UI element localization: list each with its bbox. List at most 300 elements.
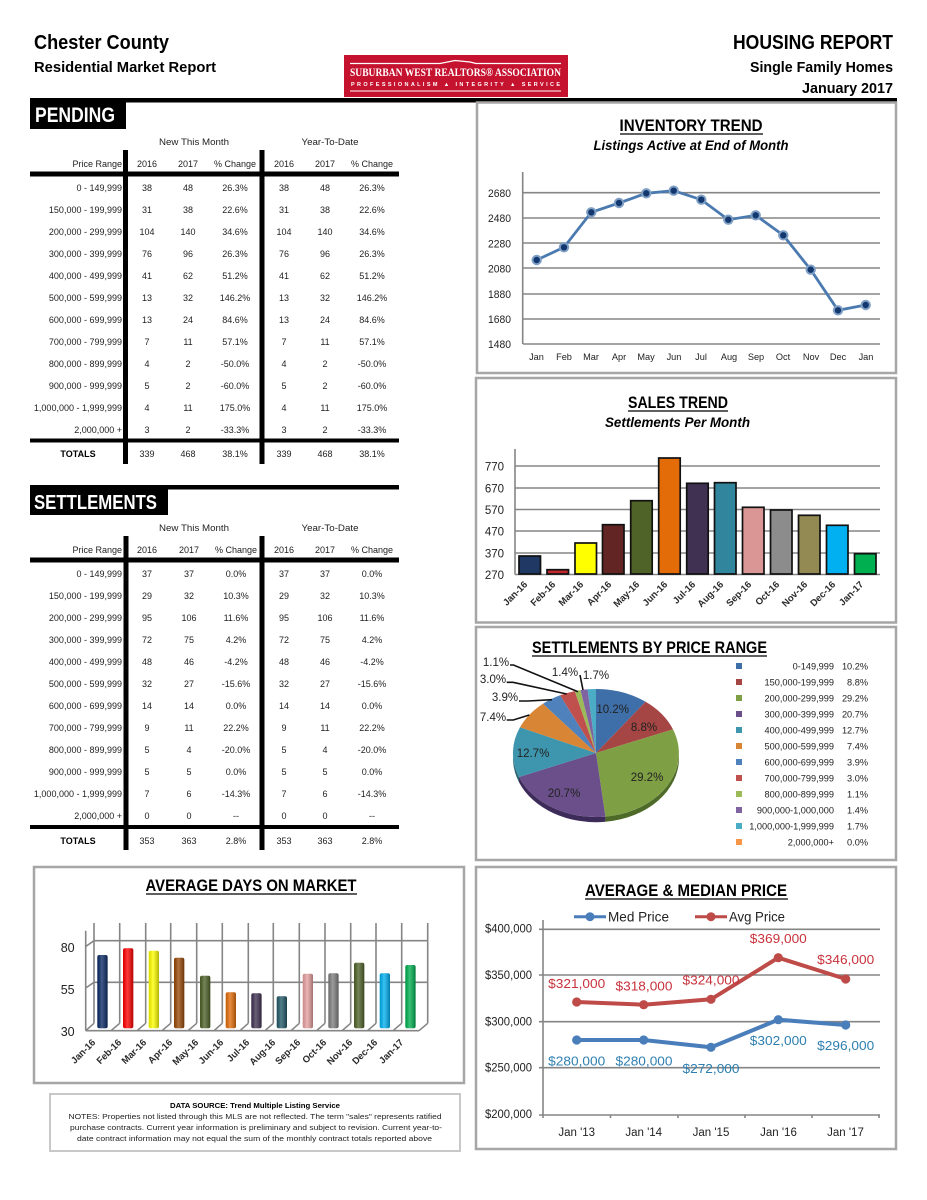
table rows: 51.2%: [222, 271, 248, 281]
heading: average days on market: AVERAGE DAYS ON MARKET: [146, 877, 356, 895]
pie chart: 7.4%: [480, 712, 506, 724]
table rows: 2: [185, 381, 191, 391]
table rows: 500,000 - 599,999: [49, 679, 122, 689]
notes: data source: NOTES: Properties not listed through this MLS are not reflected. The term "sales" represents ratified: [68, 1112, 442, 1121]
table header: [72, 137, 393, 169]
legend: price ranges: [736, 662, 868, 848]
panel: inventory trend: [477, 102, 896, 373]
table rows: -14.3%: [222, 789, 250, 799]
table rows: -33.3%: [358, 425, 386, 435]
table rows: 38: [142, 183, 152, 193]
table rows: 32: [184, 591, 194, 601]
table rows: 11: [320, 723, 330, 733]
pie chart: 1.4%: [552, 667, 578, 679]
3D bar chart: days on market: 55: [61, 983, 75, 997]
legend: price ranges: 3.0%: [847, 774, 868, 784]
table rows: 4.2%: [362, 635, 382, 645]
table rows: 46: [184, 657, 194, 667]
bar chart: sales: Nov-16: [780, 579, 810, 610]
table header: 2017: [315, 545, 335, 555]
pie chart: 20.7%: [548, 788, 580, 800]
table rows: 26.3%: [222, 183, 248, 193]
table rows: 7: [281, 337, 287, 347]
line chart: prices: $250,000: [485, 1062, 532, 1074]
table rows: 37: [142, 569, 152, 579]
legend: price ranges: 200,000-299,999: [765, 694, 834, 704]
table header: [72, 523, 393, 555]
table rows: 300,000 - 399,999: [49, 249, 122, 259]
totals row: 468: [180, 449, 196, 459]
bar chart: sales: [485, 449, 880, 610]
table rows: 72: [279, 635, 289, 645]
heading: inventory trend: INVENTORY TREND: [620, 116, 762, 135]
panel: sales trend: [476, 378, 896, 622]
totals row: 363: [317, 836, 333, 846]
table rows: 5: [322, 767, 328, 777]
totals row: 38.1%: [222, 449, 248, 459]
table rows: 106: [181, 613, 197, 623]
table rows: 7: [144, 789, 150, 799]
table rows: 2,000,000 +: [74, 811, 122, 821]
table rows: -20.0%: [222, 745, 250, 755]
table rows: 200,000 - 299,999: [49, 613, 122, 623]
totals row: 2.8%: [362, 836, 382, 846]
table rows: 2,000,000 +: [74, 425, 122, 435]
table header: 2016: [137, 159, 157, 169]
table rows: 96: [183, 249, 193, 259]
table rows: 32: [320, 293, 330, 303]
table rows: 26.3%: [359, 249, 385, 259]
line chart: inventory: 1880: [488, 289, 511, 301]
heading: sales trend: Settlements Per Month: [605, 415, 750, 430]
table rows: 13: [142, 315, 152, 325]
heading: sales trend: SALES TREND: [628, 393, 728, 412]
table rows: 11: [183, 403, 193, 413]
totals row: TOTALS: [60, 449, 96, 459]
heading: average and median price: AVERAGE & MEDIAN PRICE: [585, 882, 787, 900]
line chart: inventory: [488, 172, 880, 362]
pie chart: 29.2%: [631, 772, 663, 784]
table rows: 2: [185, 359, 191, 369]
logo: Suburban West Realtors Association: SUBURBAN WEST REALTORS® ASSOCIATION: [350, 67, 562, 79]
table rows: 5: [144, 745, 150, 755]
table header: 2017: [178, 159, 198, 169]
line chart: prices: $350,000: [485, 970, 532, 982]
table header: Year-To-Date: [302, 137, 358, 147]
line chart: inventory: 1680: [488, 314, 511, 326]
panel: average and median price: [476, 867, 896, 1149]
table rows: -60.0%: [221, 381, 249, 391]
legend: price ranges: 29.2%: [842, 694, 868, 704]
totals row: 353: [139, 836, 155, 846]
table rows: 31: [279, 205, 289, 215]
legend: price ranges: 8.8%: [847, 678, 868, 688]
totals row: 468: [317, 449, 333, 459]
3D bar chart: days on market: Oct-16: [300, 1037, 329, 1066]
table rows: -4.2%: [360, 657, 384, 667]
table rows: 76: [142, 249, 152, 259]
table rows: 62: [320, 271, 330, 281]
logo: Suburban West Realtors Association: [344, 55, 568, 97]
table rows: 6: [186, 789, 192, 799]
line chart: prices: Jan '16: [760, 1127, 797, 1139]
table rows: 37: [279, 569, 289, 579]
line chart: prices: $400,000: [485, 924, 532, 936]
legend: med and avg price: Med Price: [608, 908, 669, 924]
header: right titles: January 2017: [802, 80, 893, 97]
table rows: 27: [184, 679, 194, 689]
line chart: inventory: Mar: [583, 352, 599, 362]
table rows: 11: [184, 723, 194, 733]
3D bar chart: days on market: Sep-16: [273, 1037, 303, 1067]
table header: 2016: [274, 545, 294, 555]
table rows: 5: [281, 745, 287, 755]
line chart: inventory: Feb: [556, 352, 572, 362]
table rows: 700,000 - 799,999: [49, 723, 122, 733]
table rows: 75: [184, 635, 194, 645]
line chart: prices: $280,000: [548, 1054, 605, 1068]
table rows: 75: [320, 635, 330, 645]
table rows: 6: [322, 789, 328, 799]
table rows: 31: [142, 205, 152, 215]
totals row: 363: [181, 836, 197, 846]
table rows: 400,000 - 499,999: [49, 657, 122, 667]
table rows: -20.0%: [358, 745, 386, 755]
table rows: -15.6%: [222, 679, 250, 689]
table rows: 3: [144, 425, 150, 435]
totals row: 38.1%: [359, 449, 385, 459]
notes: data source: date contract information may not equal the sum of the monthly contract totals reported above: [77, 1134, 432, 1143]
table rows: 22.6%: [222, 205, 248, 215]
table rows: -4.2%: [224, 657, 248, 667]
line chart: inventory: 2480: [488, 213, 511, 225]
bar chart: sales: 770: [485, 462, 504, 474]
table rows: 32: [279, 679, 289, 689]
line chart: inventory: Jan: [859, 352, 873, 362]
table rows: 4: [281, 359, 287, 369]
table rows: 104: [139, 227, 155, 237]
line chart: prices: [485, 920, 880, 1139]
3D bar chart: days on market: 30: [61, 1025, 75, 1039]
table rows: 41: [279, 271, 289, 281]
panel: settlements by price range: [476, 627, 896, 860]
table header: 2016: [137, 545, 157, 555]
table rows: 11: [320, 337, 330, 347]
header: left titles: Chester County: [34, 32, 170, 54]
pie chart: 10.2%: [596, 704, 629, 716]
table rows: [34, 569, 386, 821]
table rows: 4: [322, 745, 328, 755]
table rows: 57.1%: [222, 337, 248, 347]
line chart: prices: $318,000: [616, 978, 672, 994]
legend: price ranges: 0.0%: [847, 838, 868, 848]
header: right titles: HOUSING REPORT: [733, 32, 893, 54]
line chart: prices: $272,000: [682, 1061, 740, 1076]
table rows: 0.0%: [226, 569, 246, 579]
table rows: 146.2%: [357, 293, 387, 303]
table header: Year-To-Date: [302, 523, 358, 533]
table rows: -60.0%: [358, 381, 386, 391]
3D bar chart: days on market: Mar-16: [120, 1037, 149, 1067]
notes: data source: purchase contracts. Current year information is preliminary and subject to revision. Current year-to-: [70, 1123, 443, 1132]
table header: 2017: [315, 159, 335, 169]
legend: price ranges: 10.2%: [842, 662, 868, 672]
3D bar chart: days on market: Jul-16: [225, 1037, 252, 1065]
bar chart: sales: 670: [485, 484, 504, 496]
table rows: 5: [144, 381, 150, 391]
table rows: 900,000 - 999,999: [49, 767, 122, 777]
table rows: -33.3%: [221, 425, 249, 435]
table rows: 0.0%: [362, 767, 382, 777]
legend: price ranges: 0-149,999: [793, 662, 834, 672]
3D bar chart: days on market: [61, 923, 428, 1068]
line chart: prices: Jan '15: [693, 1127, 729, 1139]
table rows: 84.6%: [359, 315, 385, 325]
table rows: 46: [320, 657, 330, 667]
table rows: 800,000 - 899,999: [49, 359, 122, 369]
panel: average days on market: [34, 867, 464, 1083]
legend: price ranges: 600,000-699,999: [765, 758, 834, 768]
table rows: 4: [281, 403, 287, 413]
table header: % Change: [214, 159, 256, 169]
table rows: 150,000 - 199,999: [49, 591, 122, 601]
table rows: -15.6%: [358, 679, 386, 689]
table rows: 13: [142, 293, 152, 303]
3D bar chart: days on market: Apr-16: [146, 1037, 175, 1066]
table rows: 5: [281, 381, 287, 391]
table rows: 48: [183, 183, 193, 193]
table rows: 0 - 149,999: [76, 569, 122, 579]
legend: price ranges: 400,000-499,999: [765, 726, 834, 736]
legend: price ranges: 150,000-199,999: [765, 678, 834, 688]
table rows: 700,000 - 799,999: [49, 337, 122, 347]
totals row: 339: [139, 449, 155, 459]
table rows: 600,000 - 699,999: [49, 315, 122, 325]
table rows: 14: [279, 701, 289, 711]
pie chart: 12.7%: [517, 748, 549, 760]
line chart: inventory: 2080: [488, 264, 511, 276]
legend: price ranges: 700,000-799,999: [765, 774, 834, 784]
bar chart: sales: May-16: [612, 579, 642, 610]
table rows: 38: [320, 205, 330, 215]
totals row: 2.8%: [226, 836, 246, 846]
table rows: [34, 183, 387, 435]
line chart: inventory: May: [637, 352, 655, 362]
table rows: 84.6%: [222, 315, 248, 325]
3D bar chart: days on market: 80: [61, 941, 75, 955]
legend: price ranges: 500,000-599,999: [765, 742, 834, 752]
heading: inventory trend: [594, 116, 788, 153]
table header: % Change: [351, 159, 393, 169]
table rows: 5: [281, 767, 287, 777]
header: right titles: [733, 32, 893, 97]
table rows: 600,000 - 699,999: [49, 701, 122, 711]
table rows: 106: [317, 613, 333, 623]
table rows: 24: [320, 315, 330, 325]
line chart: prices: $280,000: [616, 1054, 672, 1068]
table rows: 0.0%: [226, 767, 246, 777]
table rows: 400,000 - 499,999: [49, 271, 122, 281]
line chart: prices: $200,000: [485, 1109, 532, 1121]
table rows: 0.0%: [362, 701, 382, 711]
table rows: 4: [144, 403, 150, 413]
table rows: 48: [142, 657, 152, 667]
table rows: 104: [276, 227, 292, 237]
bar chart: sales: 270: [485, 570, 504, 582]
legend: price ranges: 1.4%: [847, 806, 868, 816]
table header: % Change: [215, 545, 257, 555]
3D bar chart: days on market: Aug-16: [248, 1037, 278, 1068]
bar chart: sales: Aug-16: [696, 579, 726, 610]
table rows: 1,000,000 - 1,999,999: [34, 789, 122, 799]
line chart: inventory: Jan: [529, 352, 544, 362]
table rows: 10.3%: [359, 591, 385, 601]
line chart: prices: $296,000: [817, 1038, 874, 1053]
heading: pending: PENDING: [35, 104, 115, 127]
line chart: prices: Jan '13: [558, 1127, 595, 1139]
table rows: 11.6%: [224, 613, 248, 623]
table rows: 32: [320, 591, 330, 601]
line chart: prices: Jan '17: [827, 1127, 864, 1139]
table rows: 10.3%: [223, 591, 249, 601]
table rows: 0: [186, 811, 192, 821]
table rows: 14: [320, 701, 330, 711]
pie chart: 8.8%: [631, 722, 657, 734]
bar chart: sales: 570: [485, 505, 504, 517]
table rows: 13: [279, 315, 289, 325]
legend: price ranges: 800,000-899,999: [765, 790, 834, 800]
table rows: 76: [279, 249, 289, 259]
logo: Suburban West Realtors Association: PROFESSIONALISM ▲ INTEGRITY ▲ SERVICE: [351, 82, 560, 88]
table rows: 38: [183, 205, 193, 215]
pie chart: 1.1%: [483, 657, 509, 669]
legend: price ranges: 2,000,000+: [788, 838, 834, 848]
pie chart: 1.7%: [583, 670, 609, 682]
line chart: inventory: Oct: [776, 352, 791, 362]
table rows: 1,000,000 - 1,999,999: [34, 403, 122, 413]
table rows: 2: [322, 425, 328, 435]
pie chart: [480, 657, 679, 822]
table rows: 37: [184, 569, 194, 579]
legend: price ranges: 20.7%: [842, 710, 868, 720]
line chart: inventory: Apr: [612, 352, 626, 362]
header: left titles: Residential Market Report: [34, 59, 216, 76]
notes: data source: DATA SOURCE: Trend Multiple Listing Service: [170, 1101, 340, 1110]
table rows: 300,000 - 399,999: [49, 635, 122, 645]
table rows: 0.0%: [226, 701, 246, 711]
bar chart: sales: 370: [485, 548, 504, 560]
line chart: prices: $346,000: [817, 952, 874, 967]
table rows: 62: [183, 271, 193, 281]
legend: med and avg price: [574, 908, 785, 924]
table rows: 26.3%: [222, 249, 248, 259]
table rows: --: [369, 811, 375, 821]
heading: inventory trend: Listings Active at End of Month: [594, 138, 788, 153]
table rows: 7: [144, 337, 150, 347]
table rows: 3: [281, 425, 287, 435]
bar chart: sales: Oct-16: [753, 579, 782, 608]
bar chart: sales: Jan-16: [501, 579, 530, 608]
heading: sales trend: [605, 393, 750, 430]
table rows: -50.0%: [221, 359, 249, 369]
totals row: TOTALS: [60, 836, 96, 846]
panel: settlements table: [30, 485, 399, 850]
heading: settlements: SETTLEMENTS: [34, 492, 157, 514]
table rows: 95: [142, 613, 152, 623]
line chart: prices: $300,000: [485, 1016, 532, 1028]
table rows: 11.6%: [360, 613, 384, 623]
table rows: 14: [142, 701, 152, 711]
table rows: 38: [279, 183, 289, 193]
table rows: 4: [144, 359, 150, 369]
3D bar chart: days on market: May-16: [171, 1037, 201, 1068]
totals row: [60, 449, 385, 459]
table rows: 95: [279, 613, 289, 623]
table rows: 0.0%: [362, 569, 382, 579]
line chart: inventory: 1480: [488, 339, 511, 351]
totals row: 353: [276, 836, 292, 846]
line chart: inventory: 2280: [488, 238, 511, 250]
table rows: 34.6%: [359, 227, 385, 237]
table rows: 140: [317, 227, 333, 237]
table rows: 48: [279, 657, 289, 667]
header: right titles: Single Family Homes: [750, 59, 893, 76]
table rows: 27: [320, 679, 330, 689]
line chart: inventory: Dec: [830, 352, 847, 362]
table rows: 37: [320, 569, 330, 579]
table rows: -50.0%: [358, 359, 386, 369]
bar chart: sales: Apr-16: [585, 579, 614, 608]
line chart: prices: $321,000: [548, 976, 605, 991]
3D bar chart: days on market: Nov-16: [325, 1037, 355, 1068]
table header: 2017: [179, 545, 199, 555]
table rows: 29: [279, 591, 289, 601]
table rows: 9: [144, 723, 150, 733]
table rows: 0: [281, 811, 287, 821]
table rows: 7: [281, 789, 287, 799]
table header: 2016: [274, 159, 294, 169]
legend: price ranges: 300,000-399,999: [765, 710, 834, 720]
table rows: 32: [183, 293, 193, 303]
table rows: 175.0%: [220, 403, 250, 413]
legend: price ranges: 12.7%: [842, 726, 868, 736]
table rows: 51.2%: [359, 271, 385, 281]
table rows: 13: [279, 293, 289, 303]
line chart: inventory: Jun: [667, 352, 681, 362]
table rows: 900,000 - 999,999: [49, 381, 122, 391]
bar chart: sales: Dec-16: [808, 579, 838, 609]
table rows: 2: [185, 425, 191, 435]
table header: Price Range: [72, 159, 122, 169]
table rows: 11: [183, 337, 193, 347]
table header: % Change: [351, 545, 393, 555]
table rows: 14: [184, 701, 194, 711]
bar chart: sales: Jan-17: [837, 579, 866, 608]
table rows: 146.2%: [220, 293, 250, 303]
line chart: inventory: 2680: [488, 188, 511, 200]
3D bar chart: days on market: Feb-16: [95, 1037, 124, 1067]
bar chart: sales: Jul-16: [671, 579, 698, 607]
table header: New This Month: [159, 523, 229, 533]
bar chart: sales: Mar-16: [557, 579, 586, 609]
table rows: 5: [186, 767, 192, 777]
table rows: 150,000 - 199,999: [49, 205, 122, 215]
table rows: 200,000 - 299,999: [49, 227, 122, 237]
3D bar chart: days on market: Jan-16: [69, 1037, 98, 1066]
table rows: 26.3%: [359, 183, 385, 193]
line chart: prices: $324,000: [682, 972, 740, 988]
table rows: -14.3%: [358, 789, 386, 799]
